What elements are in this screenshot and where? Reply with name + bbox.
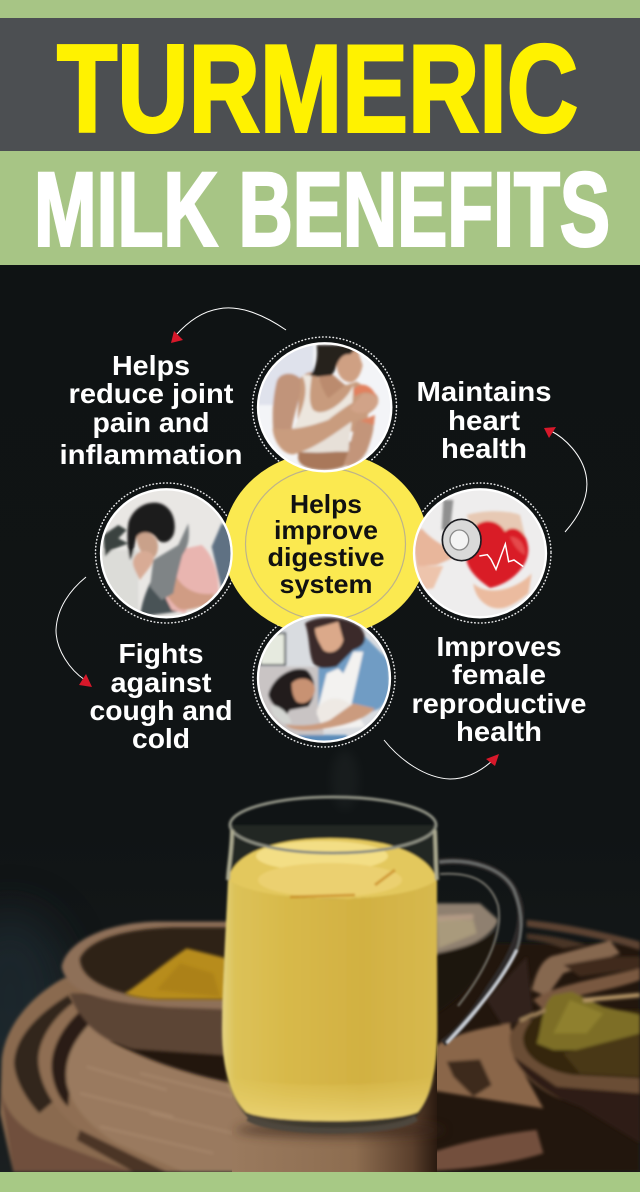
dish behind handle — [430, 903, 498, 955]
label: joint pain: pain and — [92, 407, 210, 438]
left side: tray and powder bowl — [0, 922, 240, 1172]
bowl rim — [62, 922, 240, 1010]
foreground root, lit — [430, 1130, 543, 1171]
illustration: turmeric milk scene — [0, 750, 640, 1172]
label: joint pain: reduce joint — [68, 378, 234, 409]
label: heart health — [416, 376, 552, 464]
bowl body — [70, 993, 240, 1057]
arrow: heart to maintains — [544, 427, 587, 532]
label: cough and cold — [90, 638, 232, 754]
center text: improve — [274, 515, 378, 545]
label: female reproductive health: health — [456, 716, 542, 747]
stethoscope — [442, 519, 481, 561]
label: female reproductive health: reproductive — [412, 688, 586, 719]
inner ring — [246, 468, 406, 620]
ecg line — [479, 544, 523, 569]
tray outer — [0, 967, 240, 1172]
inner groove — [52, 1008, 93, 1107]
dotted rings around photos — [96, 337, 551, 747]
bowl shadow — [110, 1040, 233, 1083]
bowl — [510, 1017, 640, 1113]
milk foam — [228, 838, 437, 899]
bowl interior — [80, 927, 240, 998]
wooden stick — [583, 995, 640, 1000]
floor patch — [430, 1023, 543, 1108]
glass mug with milk — [222, 797, 438, 1131]
photo: woman coughing — [100, 488, 233, 618]
center text: Helps — [290, 489, 362, 519]
band: dark title background — [0, 18, 640, 151]
label: female reproductive health — [412, 631, 586, 747]
background: dark photo backdrop — [0, 265, 640, 1172]
label: joint pain: inflammation — [60, 439, 242, 470]
label: cough and cold: against — [110, 667, 212, 698]
tray floor under mug — [232, 1040, 437, 1172]
mug shadow — [235, 1122, 445, 1138]
label: cough and cold: Fights — [118, 638, 204, 669]
steam — [331, 750, 359, 810]
back rim — [527, 920, 640, 950]
photo: pregnant mother and daughter — [256, 614, 392, 743]
center text: system — [280, 569, 372, 599]
label: cough and cold: cough and — [90, 695, 232, 726]
band: top green strip — [0, 0, 640, 18]
right side: tray, roots and honeycomb bowl — [430, 903, 640, 1172]
label: cough and cold: cold — [132, 723, 190, 754]
label: joint pain — [60, 350, 242, 470]
arrow: cough to fights — [56, 577, 92, 687]
arrow: top to joint pain — [171, 308, 286, 343]
center text — [268, 489, 384, 599]
glass base — [248, 1118, 416, 1131]
photo: woman with shoulder pain — [256, 342, 392, 472]
label: heart health: health — [441, 433, 527, 464]
center circle: digestive system — [223, 452, 428, 636]
photo: heart and stethoscope — [412, 488, 548, 618]
powder mound — [125, 948, 227, 999]
milk body — [222, 880, 437, 1121]
slate surface glow — [0, 910, 70, 1090]
floor — [66, 1020, 240, 1172]
arrow: reproductive — [384, 740, 499, 779]
band: green subtitle background — [0, 151, 640, 265]
raised ring — [38, 1000, 240, 1172]
roots — [532, 941, 620, 997]
band: bottom green strip — [0, 1172, 640, 1192]
mug handle — [439, 861, 521, 1043]
wood grain — [80, 1067, 233, 1153]
label: joint pain: Helps — [112, 350, 190, 381]
label: heart health: heart — [448, 405, 520, 436]
glass rim — [230, 797, 436, 853]
wood behind handle — [487, 957, 533, 1027]
label: heart health: Maintains — [416, 376, 552, 407]
label: female reproductive health: female — [452, 659, 546, 690]
center text: digestive — [268, 542, 384, 572]
foreground root, dark — [447, 1059, 492, 1097]
outer groove — [14, 995, 75, 1113]
label: female reproductive health: Improves — [436, 631, 562, 662]
